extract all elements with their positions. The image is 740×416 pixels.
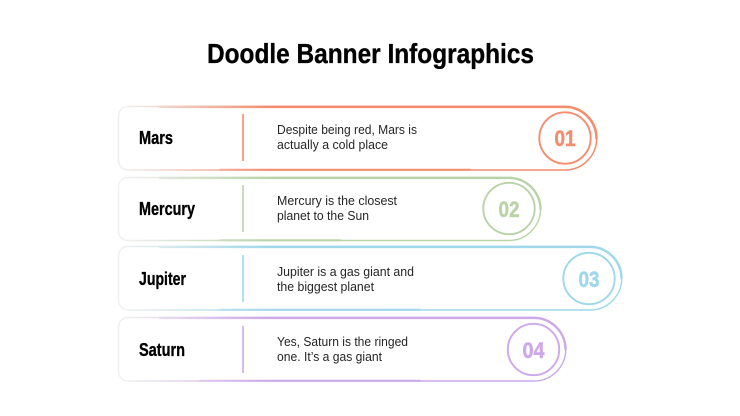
banner outline [118, 246, 622, 310]
description: actually a cold place [277, 138, 388, 152]
description: planet to the Sun [277, 209, 369, 223]
number badge 02 [483, 183, 535, 234]
description: Yes, Saturn is the ringed [277, 335, 408, 349]
description: Despite being red, Mars is [277, 123, 417, 137]
label: Jupiter: Jupiter [139, 268, 186, 289]
description: the biggest planet [277, 280, 375, 294]
number badge 01 [539, 112, 591, 164]
divider [242, 326, 244, 373]
banner outline [118, 106, 597, 170]
number badge 02: 02 [498, 197, 520, 222]
number badge 03 [563, 253, 615, 304]
panel: Saturn [118, 318, 566, 381]
divider [242, 185, 244, 232]
panel: Jupiter [118, 246, 622, 310]
description: Mercury is the closest [277, 194, 398, 208]
banner outline [118, 178, 541, 240]
panel: Mercury [118, 178, 541, 240]
number badge 04: 04 [522, 338, 545, 363]
description: Jupiter is a gas giant and [277, 265, 414, 279]
label: Saturn: Saturn [139, 339, 185, 360]
divider [242, 114, 244, 161]
description: one. It’s a gas giant [277, 350, 383, 364]
number badge 01: 01 [554, 126, 576, 151]
label: Mercury: Mercury [139, 198, 196, 219]
title: Doodle Banner Infographics [207, 38, 534, 69]
banner outline [118, 318, 566, 381]
panel: Mars [118, 106, 597, 170]
number badge 04 [508, 324, 559, 375]
divider [242, 255, 244, 302]
number badge 03: 03 [578, 267, 600, 292]
label: Mars: Mars [139, 127, 173, 148]
